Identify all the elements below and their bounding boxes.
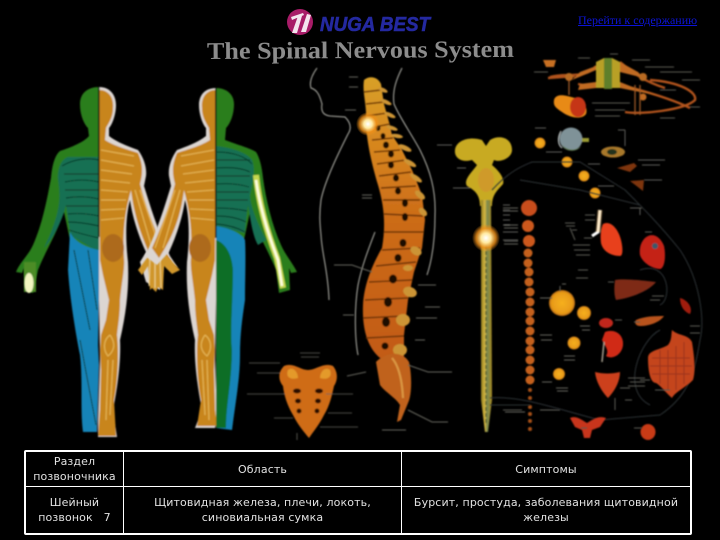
left body: rib lines	[62, 159, 99, 425]
cell: vertebra: позвонок 7	[38, 511, 111, 524]
right arm: glowing pain line	[256, 175, 283, 288]
figure: left body dermatomes and skeleton	[16, 87, 178, 437]
icon: intestine	[648, 330, 695, 398]
sacrum detail	[247, 353, 358, 440]
small head glands	[617, 163, 644, 191]
icon: spleen	[680, 298, 691, 314]
left body: green dermatome half	[16, 87, 99, 293]
right body: green dermatome half	[216, 88, 297, 293]
icon: spine pain glow	[356, 112, 380, 136]
spine: vertebra bodies	[363, 77, 425, 358]
brain: highlight	[478, 168, 494, 192]
blood vessel section	[554, 95, 587, 118]
figure: right body dermatomes and skeleton	[145, 88, 297, 430]
sacrum: highlights	[287, 369, 331, 379]
icon: small pelvic organ	[640, 424, 656, 440]
icon: lung	[592, 210, 622, 256]
cross-section: small organ	[543, 60, 556, 67]
right body: white skeleton half	[145, 88, 217, 428]
spine: sacrum and coccyx	[376, 354, 411, 422]
icon: bladder	[595, 372, 620, 398]
left body: white skeleton half	[98, 87, 178, 437]
spine annotation labels	[334, 77, 452, 430]
right body: rib and bone highlights	[155, 150, 214, 420]
header: section: Раздел	[54, 455, 95, 468]
right body: rib lines	[217, 152, 252, 232]
right body: green inner leg	[216, 240, 233, 428]
brain: cerebellum	[455, 137, 512, 206]
figure: crossed hands	[138, 254, 180, 292]
sacrum: annotation lines	[247, 353, 358, 440]
cross-section: grey matter	[596, 58, 620, 88]
spine: segment gaps	[363, 90, 424, 338]
left body: orange muscle and nerves	[98, 90, 172, 436]
icon: kidney	[599, 318, 623, 362]
spine: vertebral column	[363, 77, 429, 422]
icon: liver	[614, 279, 656, 300]
ganglia: labels	[503, 208, 560, 412]
spine: nerve openings	[376, 125, 408, 350]
right body: orange muscle and nerves	[152, 90, 217, 426]
header: symptoms: Симптомы	[515, 462, 577, 476]
nerve pathways	[490, 162, 702, 420]
spinal cord	[481, 200, 492, 432]
cell: area text	[154, 496, 371, 524]
spinal cord cross-section	[534, 54, 700, 118]
cross-section: outer wings	[572, 62, 660, 96]
upper right labels	[535, 128, 665, 215]
cell: symptoms text	[414, 496, 678, 524]
right body: pelvis	[189, 234, 211, 262]
header: area: Область	[238, 462, 287, 476]
logo: Nuga Best	[287, 9, 432, 36]
ganglia: thoracic	[524, 248, 534, 384]
icon: spinal cord glow	[472, 224, 500, 252]
icon: optic organ	[601, 146, 625, 158]
icon: uterus	[570, 417, 606, 438]
head ganglia	[534, 138, 600, 198]
cell: symptoms text: железы	[523, 511, 569, 524]
spine: spinous processes	[378, 86, 429, 356]
icon: left hand glow	[24, 262, 36, 293]
ganglia: large red	[521, 200, 537, 216]
gland sphere labels	[540, 284, 590, 391]
logo: Nuga Best: NUGA BEST	[320, 14, 432, 36]
cross-section: nerve roots	[548, 62, 695, 113]
cross-section: ganglia	[565, 73, 573, 81]
sacrum: bone	[279, 365, 337, 438]
ganglia: lower small	[528, 388, 532, 431]
right body: blue hip and leg	[216, 226, 245, 430]
cell: vertebra: Шейный	[50, 496, 99, 509]
organ labels	[503, 215, 700, 428]
left body: teal torso	[44, 157, 99, 252]
cross-section: labels	[534, 54, 700, 118]
header: section: позвоночника	[33, 470, 116, 483]
left body: blue lower half and leg	[68, 232, 99, 432]
title: The Spinal Nervous System	[207, 37, 514, 65]
sacrum: openings	[293, 388, 323, 414]
icon: eye	[558, 128, 589, 151]
cell: area text: синовиальная сумка	[202, 511, 323, 524]
icon: pancreas	[635, 316, 664, 326]
right body: teal torso	[216, 146, 266, 245]
brain stem and spinal cord	[437, 137, 518, 432]
icon: heart	[640, 235, 665, 269]
gland spheres	[549, 290, 591, 380]
left body: rib and bone highlights	[101, 150, 160, 420]
cell: symptoms text: Бурсит, простуда, заболевания щитовидной	[414, 496, 678, 509]
table: spine section, area, symptoms	[24, 450, 692, 535]
brain: labels	[437, 145, 518, 240]
left body: pelvis	[102, 234, 124, 262]
cell: vertebra	[38, 496, 111, 524]
side profile body outline	[310, 68, 435, 355]
cross-section: vertical roots	[569, 80, 640, 115]
link: go to contents: Перейти к содержанию	[578, 13, 697, 27]
ganglia column	[503, 200, 560, 431]
cell: area text: Щитовидная железа, плечи, локоть,	[154, 496, 371, 509]
header: section	[33, 455, 116, 483]
